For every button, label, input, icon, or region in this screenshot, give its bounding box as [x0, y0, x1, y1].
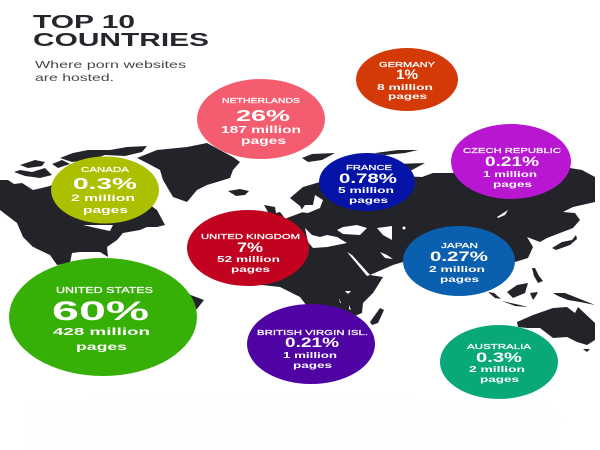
circle: United States: 60%	[52, 296, 149, 326]
circle: Japan: 0.27%	[430, 249, 488, 264]
circle: United Kingdom	[187, 210, 309, 286]
circle: United States	[9, 258, 197, 376]
circle: Czech Republic: 0.21%	[485, 154, 539, 169]
circle: United States: 428 million	[53, 326, 150, 338]
circle: Canada: 0.3%	[73, 176, 137, 193]
circle: Netherlands: pages	[241, 136, 287, 147]
map: North America	[0, 170, 165, 265]
map: New Guinea	[553, 293, 595, 305]
circle: France: pages	[349, 195, 388, 205]
circle: Australia	[440, 325, 558, 399]
world map	[0, 143, 595, 352]
map: Australia	[517, 307, 595, 345]
circle: Netherlands: 187 million	[221, 125, 301, 136]
circle: Czech Republic: CZECH REPUBLIC	[463, 146, 562, 155]
subtitle: Where porn websites	[35, 59, 186, 71]
circle: France	[319, 153, 415, 211]
map: Madagascar	[370, 308, 384, 325]
circle: France: 0.78%	[339, 171, 397, 186]
circle: Canada: 2 million	[71, 193, 135, 204]
map: Sulawesi	[530, 292, 538, 300]
circle: Netherlands: 26%	[236, 108, 290, 125]
circle: Canada: CANADA	[81, 165, 129, 174]
circle: United Kingdom: 52 million	[217, 254, 280, 264]
circle: Germany	[356, 48, 458, 111]
circle: Czech Republic: 1 million	[483, 169, 537, 179]
circle: British Virgin Islands: 0.21%	[285, 335, 339, 350]
circle: Netherlands: NETHERLANDS	[222, 96, 300, 105]
circle: Japan: 2 million	[429, 264, 485, 274]
circle: Japan: pages	[440, 274, 479, 284]
circle: France: FRANCE	[346, 163, 392, 172]
circle: United Kingdom: pages	[231, 264, 270, 274]
circle: France: 5 million	[338, 185, 394, 195]
map: Arctic islands	[14, 146, 147, 178]
title: COUNTRIES	[33, 30, 209, 50]
map: Sumatra and Java	[488, 292, 528, 307]
map: South America fragment	[188, 294, 204, 312]
circle: Australia: pages	[480, 374, 519, 384]
map: Novaya and Svalbard islands	[302, 150, 425, 172]
circle: British Virgin Islands: 1 million	[283, 350, 337, 360]
circle: Germany: 1%	[396, 67, 418, 82]
circle: Netherlands	[197, 79, 325, 159]
circle: Czech Republic	[451, 124, 571, 199]
circle: Japan	[403, 226, 515, 296]
map: Borneo	[507, 283, 528, 298]
map: Tasmania	[583, 349, 590, 352]
circle: United States: pages	[76, 341, 127, 353]
circle: Germany: 8 million	[377, 82, 433, 92]
map: Britain	[264, 205, 284, 217]
title: TOP 10	[33, 12, 135, 32]
map: Philippines	[532, 268, 543, 283]
circle: Japan: JAPAN	[441, 241, 478, 250]
circle: Germany: pages	[388, 91, 427, 101]
circle: British Virgin Islands: BRITISH VIRGIN ISL.	[257, 328, 368, 337]
map: Japan	[552, 235, 577, 250]
circle: United Kingdom: 7%	[237, 240, 263, 255]
circle: Canada	[51, 156, 159, 224]
circle: Canada: pages	[83, 205, 128, 216]
faint background shape	[25, 397, 561, 450]
circle: Australia: 0.3%	[476, 350, 522, 365]
map: Iceland	[228, 189, 249, 196]
circle: Czech Republic: pages	[493, 179, 532, 189]
circle: British Virgin Islands: pages	[293, 360, 332, 370]
circle: Australia: 2 million	[469, 364, 525, 374]
subtitle	[35, 59, 186, 84]
map: Greenland	[137, 143, 240, 202]
map: Eurasia and Africa	[262, 168, 595, 320]
circle: United Kingdom: UNITED KINGDOM	[201, 232, 300, 241]
title	[33, 12, 209, 50]
circle: Australia: AUSTRALIA	[467, 342, 531, 351]
subtitle: are hosted.	[35, 72, 114, 84]
map: seas and lakes	[33, 195, 508, 310]
circle: British Virgin Islands	[247, 304, 375, 384]
circle: United States: UNITED STATES	[56, 286, 153, 295]
circle: Germany: GERMANY	[379, 60, 435, 69]
